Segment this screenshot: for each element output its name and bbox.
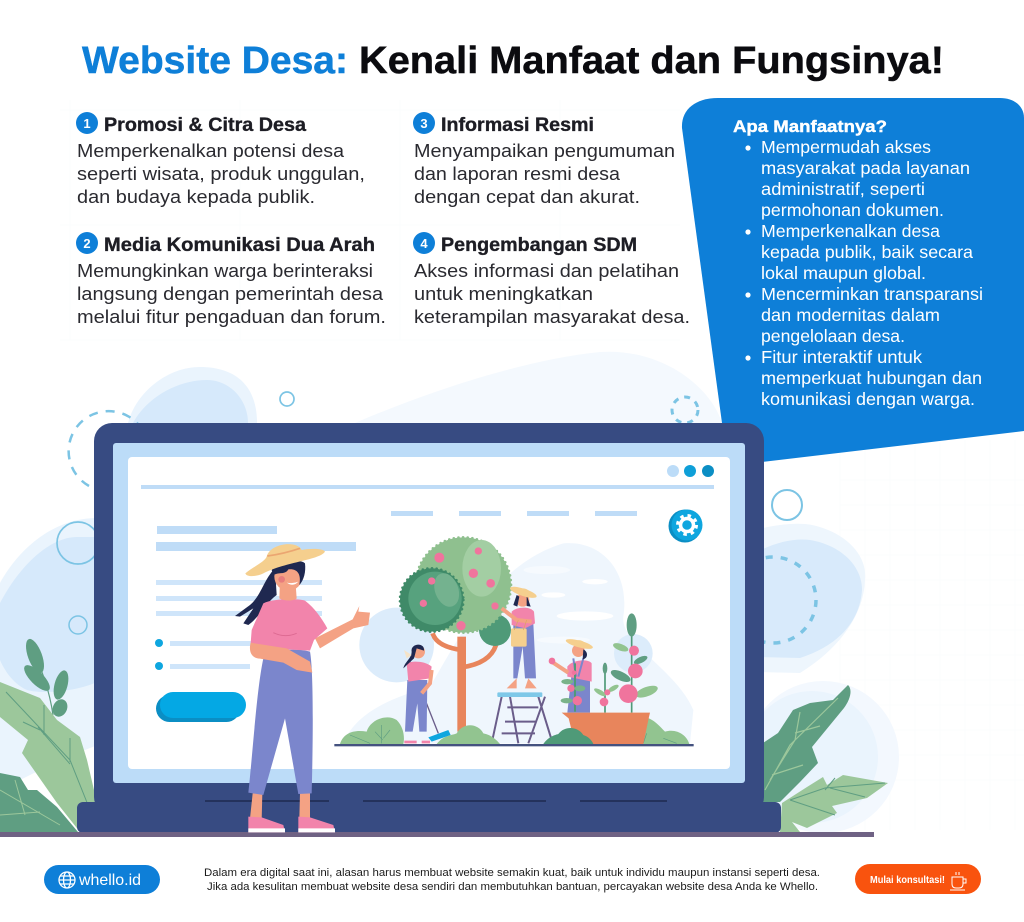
icon: number 1 — [76, 112, 98, 134]
plant pot with tomatoes — [543, 613, 659, 744]
illustration: garden scene — [235, 537, 694, 832]
background blobs — [0, 352, 899, 833]
icon: number 4: 4 — [420, 236, 428, 251]
panel: item 3 informasi resmi — [413, 112, 675, 207]
footer: consultation button: Mulai konsultasi! — [870, 874, 945, 886]
bullet list: Mempermudah akses — [761, 137, 931, 157]
legs and shoes — [248, 793, 335, 832]
footer: whello logo badge: whello.id — [78, 872, 141, 889]
tree — [400, 537, 511, 732]
icon: number 3: 3 — [420, 116, 428, 131]
text: pengembangan sdm: keterampilan masyarakat desa. — [414, 307, 690, 327]
gardener with rake — [403, 645, 451, 743]
laptop body — [94, 423, 764, 815]
bullet list: administratif, seperti — [761, 179, 925, 199]
laptop — [77, 423, 781, 833]
heading: apa manfaatnya: Apa Manfaatnya? — [733, 117, 887, 136]
main woman — [235, 544, 370, 832]
icon: right leaves — [755, 685, 888, 832]
icon: number 2: 2 — [83, 236, 91, 251]
bullet list: lokal maupun global. — [761, 263, 926, 283]
floor line — [0, 832, 874, 837]
footer: whello logo badge — [44, 865, 160, 894]
laptop screen — [113, 443, 745, 783]
icon: coffee cup — [950, 872, 966, 890]
scene background — [343, 543, 693, 743]
text: informasi resmi: dengan cepat dan akurat. — [414, 187, 640, 207]
text: promosi: dan budaya kepada publik. — [77, 187, 315, 207]
title: Kenali Manfaat dan Fungsinya! — [359, 40, 944, 82]
arm — [315, 606, 370, 648]
panel: item 4 pengembangan sdm — [413, 232, 690, 327]
text placeholder bars — [155, 526, 356, 670]
trousers — [248, 650, 313, 795]
panel: item 1 promosi — [76, 112, 365, 207]
text: promosi: Memperkenalkan potensi desa — [77, 141, 345, 161]
heading: informasi resmi: Informasi Resmi — [441, 115, 594, 136]
text: pengembangan sdm — [414, 261, 690, 327]
bullet list: pengelolaan desa. — [761, 326, 905, 346]
panel: item 2 media komunikasi — [76, 232, 386, 327]
ponytail — [235, 568, 277, 625]
bullet list: kepada publik, baik secara — [761, 242, 973, 262]
icon: globe — [59, 872, 75, 888]
bushes — [340, 717, 689, 744]
footer: consultation button — [855, 864, 981, 894]
text: media komunikasi: Memungkinkan warga berinteraksi — [77, 261, 373, 281]
gardener with plant — [549, 637, 594, 713]
button — [156, 692, 246, 722]
blue panel shape — [682, 98, 1024, 462]
bullet list: Memperkenalkan desa — [761, 221, 940, 241]
bullet list: dan modernitas dalam — [761, 305, 940, 325]
nav bars — [391, 511, 637, 516]
heading: media komunikasi: Media Komunikasi Dua Arah — [104, 235, 375, 256]
ground line — [334, 744, 694, 746]
text: informasi resmi — [414, 141, 675, 207]
heading: pengembangan sdm: Pengembangan SDM — [441, 235, 637, 256]
text: media komunikasi: langsung dengan pemerintah desa — [77, 284, 384, 304]
text: promosi — [77, 141, 365, 207]
bullet list: Fitur interaktif untuk — [761, 347, 922, 367]
text: media komunikasi — [77, 261, 386, 327]
icon: number 3 — [413, 112, 435, 134]
text: promosi: seperti wisata, produk unggulan, — [77, 164, 365, 184]
gardener on ladder — [491, 585, 538, 688]
footer text: Jika ada kesulitan membuat website desa sendiri dan membutuhkan bantuan, percayakan website desa Anda ke Whello. — [207, 881, 818, 893]
panel: apa manfaatnya — [682, 98, 1024, 462]
text: pengembangan sdm: untuk meningkatkan — [414, 284, 593, 304]
shirt — [251, 599, 327, 651]
bullet list: masyarakat pada layanan — [761, 158, 970, 178]
icon: left leaves — [0, 637, 106, 832]
title: Website Desa: — [82, 40, 348, 82]
title — [82, 40, 944, 82]
text: informasi resmi: dan laporan resmi desa — [414, 164, 621, 184]
hat — [245, 544, 325, 576]
text: informasi resmi: Menyampaikan pengumuman — [414, 141, 675, 161]
laptop base — [77, 802, 781, 833]
head — [279, 580, 297, 600]
footer text — [204, 867, 820, 893]
forearm — [250, 643, 312, 673]
footer text: Dalam era digital saat ini, alasan harus membuat website semakin kuat, baik untuk individu maupun instansi seperti desa. — [204, 867, 820, 879]
heading: promosi: Promosi & Citra Desa — [104, 115, 306, 136]
window bar — [141, 465, 714, 489]
bullet list: komunikasi dengan warga. — [761, 389, 975, 409]
ladder — [492, 692, 553, 743]
bullet list — [745, 137, 983, 409]
decorative circles — [57, 392, 816, 643]
icon: number 2 — [76, 232, 98, 254]
text: pengembangan sdm: Akses informasi dan pelatihan — [414, 261, 679, 281]
icon: gear — [668, 510, 702, 542]
bullet list: memperkuat hubungan dan — [761, 368, 982, 388]
bullet list: Mencerminkan transparansi — [761, 284, 983, 304]
text: media komunikasi: melalui fitur pengaduan dan forum. — [77, 307, 386, 327]
icon: number 4 — [413, 232, 435, 254]
bullet list: permohonan dokumen. — [761, 200, 944, 220]
icon: number 1: 1 — [83, 116, 91, 131]
